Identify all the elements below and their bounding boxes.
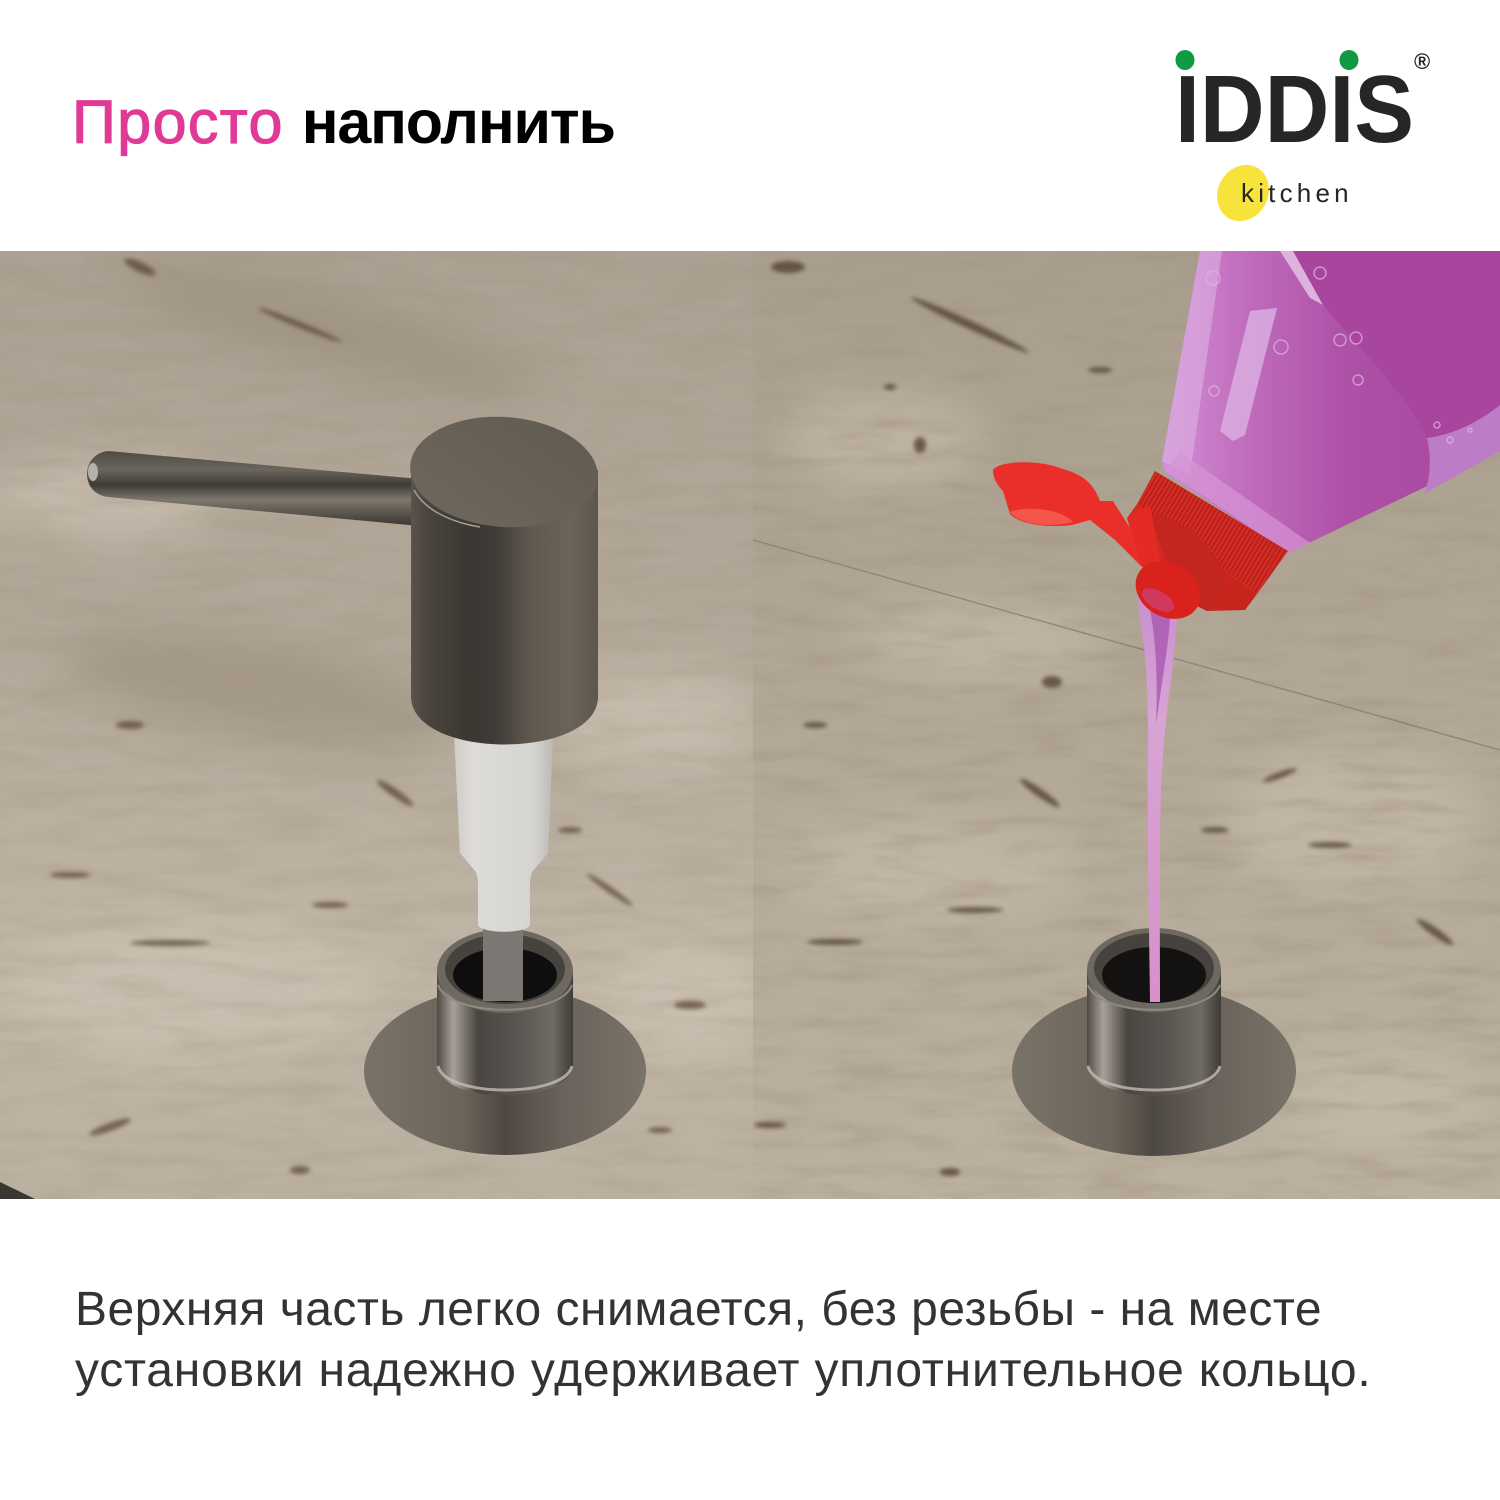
icon: base flange	[1012, 928, 1296, 1156]
icon: dispenser head	[406, 411, 602, 744]
logo: IDDIS kitchen: ®	[1414, 49, 1430, 74]
panel: pouring soap	[753, 251, 1500, 1199]
icon: base flange	[364, 925, 646, 1155]
logo: IDDIS kitchen: IDDIS	[1175, 56, 1414, 163]
text block: description: Верхняя часть легко снимается, без резьбы - на месте	[75, 1283, 1322, 1336]
icon: dispenser lever	[87, 451, 420, 526]
title: Просто наполнить	[72, 88, 615, 156]
logo: IDDIS kitchen: kitchen	[1241, 178, 1353, 208]
panel: dispenser removed from counter	[0, 251, 753, 1199]
icon: white pump tube	[454, 735, 553, 932]
icon: soap bottle	[993, 251, 1500, 630]
text block: description	[75, 1283, 1372, 1397]
logo: IDDIS kitchen	[1175, 49, 1430, 222]
text block: description: установки надежно удерживает уплотнительное кольцо.	[75, 1344, 1372, 1397]
icon: soap stream	[1137, 594, 1177, 1002]
